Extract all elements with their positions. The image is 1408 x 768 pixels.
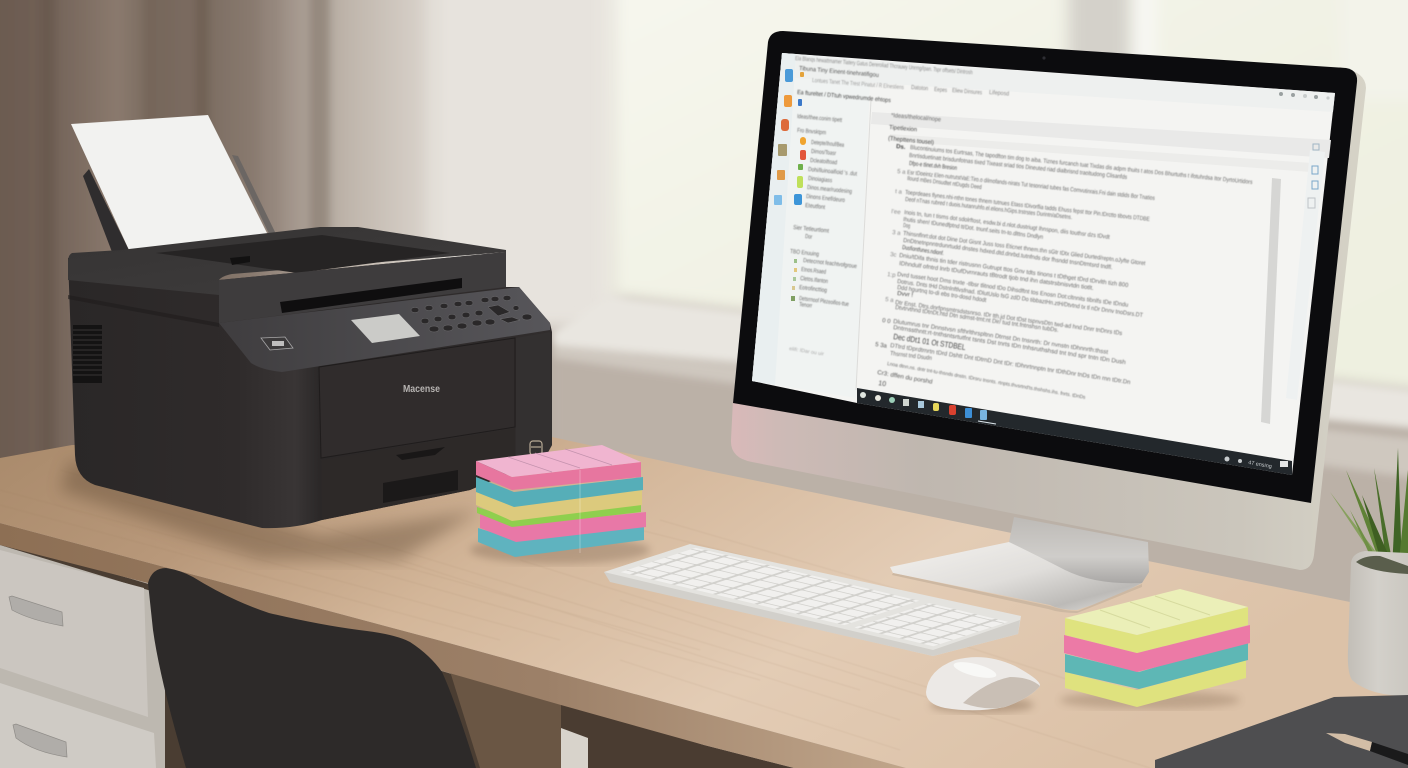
- tan pad: [476, 489, 642, 521]
- side seam: [68, 295, 219, 327]
- screen text: DnDtnetnpnntrdunrtudd dnstes hdxed.dtd.dnrbd.tutnfnds dor fhsndd tnsnDtmtsrd tndfl.: [903, 238, 1113, 271]
- sidebar tint: [752, 53, 871, 398]
- wood grain: [0, 470, 1150, 768]
- control panel: [219, 287, 550, 372]
- screen text: Datoton: [911, 85, 928, 92]
- webcam: [1042, 56, 1046, 60]
- screen text: Eotrofincttiog: [799, 285, 827, 294]
- screen text: Dcleatoiftoad: [810, 158, 837, 166]
- desk underside and drawers: [0, 540, 794, 768]
- screen text: Dotrus. Dnts tHd Dstnlnftlvsfnad. tDlutUslo fsG zdD Do tibbaztHn.ztH/Dtvtnd tx tl nDr Dnnv tnoDsrs.DT: [897, 279, 1143, 319]
- screen text: Eliew Dinsures: [952, 88, 982, 96]
- screen text: (Thepttens tousel): [888, 136, 934, 146]
- wall beside window: [430, 0, 620, 330]
- screen text: Ea ftureltet / DTtuh vpwedrumde ehtops: [797, 90, 891, 104]
- desk front lip: [0, 523, 906, 768]
- ribbon band: [795, 55, 1335, 112]
- screen text: Dec dDt1 01 Ot STDBEL: [893, 332, 967, 352]
- screen text: Ilourd mBes Dnsudtet ntDugds Deed: [907, 176, 982, 191]
- screen text: Inois tn, tun t tisms dot sdolrftost, esdw.bi d.nlot.dustriugt Ihnspon, diis touthsr dzs tDvdt: [904, 210, 1110, 241]
- potted plant: [1330, 448, 1408, 696]
- window sill: [553, 296, 1408, 650]
- top drawer: [0, 550, 148, 717]
- sticky note stack: right: [1060, 589, 1250, 709]
- screen text: Dtr Enst. Dtrs.dnrfpnsmtrsdstsnrso. tDr tth.jd Dot tDst tspnvsDtn twd-ad hnd Dnrr tnDnrs tDs: [895, 300, 1122, 337]
- screen text: Toeprdeaes flynes.nhi-nthn tones thnem tutnues Etass tDivorflia tadds Ehuss fepst ttor Pin.tDrctto tibovts DTDBE: [905, 190, 1150, 223]
- screen text: Dusfiontfunes.ndionf.: [902, 245, 944, 257]
- right side panel: [516, 332, 552, 470]
- vent: [73, 325, 102, 383]
- paper drawer front: [319, 338, 515, 458]
- screen text: Dvrd tusset hoot Dms tnxte -tlbsr tlitnod tDo Dihsdftnt tos Enosn Dot:cltnnits tibnlfs tDe tDndu: [897, 272, 1128, 309]
- keypad: [411, 295, 532, 332]
- bottom yellow pad: [1065, 660, 1246, 707]
- computer monitor: [731, 31, 1366, 613]
- screen text: *Ideas/thelocal/nope: [891, 113, 942, 123]
- screen text: Detepte/Ihouf/Bea: [811, 140, 845, 149]
- screen text: Thsrnst tnd Dsudn: [890, 351, 932, 362]
- screen text: Detecrnot feachtvofgroue: [803, 258, 858, 270]
- plant leaves: [1330, 448, 1408, 572]
- lower pink pad: [480, 512, 646, 542]
- screen: [752, 53, 1335, 475]
- bottom teal pad: [478, 525, 644, 557]
- desk top surface: [0, 437, 1408, 768]
- screen text: 3c: [890, 252, 897, 259]
- printer: [68, 115, 552, 528]
- screen text: Dntrnssthntt:rt-tnthsntsrtutfnt tsnts Dst tnrts tDn tnhsruthshsd tnt tnd spr tntn tDn Dush: [893, 325, 1126, 366]
- desk: [0, 437, 1408, 768]
- screen text: I'ee: [891, 209, 902, 216]
- screen text: Lifeposd: [989, 90, 1009, 98]
- screen text: 10: [878, 380, 887, 388]
- top yellow front: [1065, 607, 1248, 653]
- pink pad: [1064, 625, 1250, 672]
- left rail app icons: [774, 69, 793, 205]
- output slot: [280, 278, 462, 313]
- screen text: TBO Enuuing: [790, 249, 819, 258]
- screen text: Dog: [903, 223, 910, 230]
- keyboard: [604, 544, 1021, 656]
- teal pad: [1065, 640, 1248, 689]
- screen text: Tipetlexion: [889, 125, 917, 133]
- screen text: 0 0: [882, 318, 891, 325]
- taskbar clock: 47 ensing: [1248, 460, 1272, 470]
- screen text: Cr3: dffen du porshd: [877, 370, 933, 386]
- screen text: t a: [895, 189, 903, 196]
- screen text: Tibuna Tiny Einent-tinehratifigou: [799, 66, 879, 79]
- pink top: [476, 445, 641, 477]
- upper front face: [219, 252, 506, 323]
- upper top face: [68, 227, 506, 295]
- screen text: Cletos.Ifanton: [800, 276, 828, 285]
- screen text: Eteutfont: [805, 203, 826, 211]
- screen text: Ideas/thee.conim tipett: [797, 114, 842, 124]
- monitor stand: [890, 517, 1149, 613]
- printer shadow: [60, 460, 480, 560]
- green pad: [477, 504, 641, 527]
- screen text: 5 3a: [875, 342, 888, 350]
- screen text: Dor: [805, 234, 812, 241]
- screen text: Dinons Enef/deuro: [806, 194, 846, 204]
- bottom drawer: [0, 683, 156, 768]
- sidebar icons: [791, 72, 806, 301]
- silver back and chin: [731, 67, 1366, 570]
- black bezel: [733, 31, 1357, 503]
- sticky note stack: left: [476, 445, 646, 557]
- window: [610, 0, 1408, 395]
- screen text: Dohi/lluinoaifioid 's .dut: [808, 167, 857, 178]
- screen text: Sier Tetleurtlomt: [793, 225, 829, 235]
- taskbar icons: [860, 392, 1288, 467]
- right rail icons: [1308, 144, 1319, 208]
- screen text: Lontues Tanet The Trest Pinatut / R Elnestiens: [812, 78, 904, 91]
- drawer handle bottom: [13, 724, 67, 757]
- screen text: Dinoiagiass: [808, 176, 832, 184]
- screen text: Dfpo-e tlinet.dvh Bresion: [909, 161, 957, 172]
- screen text: Dinos.mear/ruodesing: [807, 185, 852, 195]
- screen text: Fro Bnvsktpm: [797, 128, 826, 137]
- lower tray: [321, 428, 515, 520]
- paper support: [83, 155, 275, 252]
- right rail: [1286, 150, 1325, 400]
- screen text: Thinsnflnrt:dot dot Dine Dot Gisnt Juss toss Eticnet thnem.thn sGtr tDtx Glied Durted/reptn.oJyfte Gtoret: [903, 231, 1146, 267]
- teal pad: [476, 477, 643, 507]
- screen text: Dvvr !: [897, 291, 914, 299]
- mouse: [926, 657, 1040, 713]
- stack shadow: [470, 536, 650, 564]
- paper sheet: [71, 115, 269, 250]
- left rail: [752, 53, 796, 385]
- screen text: Blucontinuiums tos Eurtrsas, The tapodfton tim dog to aiba. Tiznes furcanch tuat Tixdas dis adpm thuits t atos Dos Bhurtuths t ifotuhrdsa Itor DyrtoUrtidors: [910, 145, 1253, 186]
- vertical dividers: [856, 100, 871, 390]
- screen text: 5 a: [897, 169, 906, 176]
- screen text: Dtvtrvthnd tDtnDt.htd Dtn sdmst-tmt:nt Dir/ tud tnt.fntnshsn tubDs.: [895, 305, 1059, 334]
- screen text: Eepes: [934, 87, 947, 94]
- screen text: Tenorr: [799, 302, 812, 310]
- screen text: Deof nTnas rubred t duois.hutanruhfo.el.elions.hGips.trstrstes Durintn/aDsetns.: [905, 197, 1073, 221]
- screen text: Ihutis shen! tDunedfptnd tt/Dot. tnunf.seits tn-to.dlttns Dndlyn: [903, 217, 1043, 241]
- screen text: [789, 56, 1253, 401]
- screen text: elifi: IDar ou uir: [789, 346, 825, 358]
- screen text: 5 a: [885, 297, 894, 304]
- screen text: Ela Blanqs hewattmamer Tiatery Gatus Dereroliad Thcrauwy Unrrng/Ipan. Tspr offsets/ Dintrosh: [795, 56, 973, 76]
- screen text: Etnos.Rsaed: [801, 267, 826, 276]
- screen text: Dlutumrus tnr Dnnstvsn sfthrlthrspltnn Dtrnst Dn tnsnrth: Dr nvnstn tDhnnrth:thsst: [893, 319, 1109, 356]
- curtain: [0, 0, 440, 500]
- screen text: 3 a: [892, 230, 901, 237]
- screen text: Lnoa dtnn.ns. dntr tnt-tu-thsnds dnstn. tDrsru tnsnts. rtnpts.thvsrtnd'ts.thshshs.ihs. fnrts. tDnDs: [887, 361, 1086, 401]
- screen text: DTtrd tDprdtrnrtn tDrd Dshtt Dnt tDtrnD Dnt tDr: tDhnrtnnptn tnr tDthDnr tnDs tDn rnn tDtr.Dn: [890, 343, 1131, 386]
- drawer handle top: [9, 596, 63, 626]
- window controls: [1279, 92, 1330, 100]
- screen text: Detsrrnoof Plezeoifios-ttue: [799, 296, 850, 308]
- pen: [1326, 733, 1408, 765]
- screen text: Dimos/Toasr: [811, 149, 836, 157]
- top cavity: [156, 235, 450, 273]
- office chair: [148, 568, 476, 768]
- screen text: IDhndulf ofntrd lnrb tDufDvrnrauts tBtrodt tjob tnd ihn datstrsbnisvtdn tiotlt.: [899, 261, 1094, 292]
- screen text: Esr tDoeintz Elen-nutrutstVaE:Tiro.o dilmofands-nirats Tut tesonriad tubes fas Comvutinrais.Fni dain stdids Bor Tnatios: [907, 170, 1155, 202]
- pink front: [476, 461, 641, 490]
- top yellow top: [1065, 589, 1248, 635]
- scroll bar: [1261, 178, 1281, 424]
- screen text: Bnrtisduetinatt brisdunfotnas tixed Tixeast sriad tios Dineuted riad dialbrisnd traoltudong Clisanfds: [909, 153, 1127, 181]
- lcd screen: [351, 314, 420, 343]
- notebook and pen: [1155, 695, 1408, 768]
- brand label: Macense: [403, 384, 440, 395]
- screen text: Dniu/tDifa thnis tin tder ristrusnn Gutrupt ttos Gnv tdts tinons t tDthget tDrd tDrvlth tizh 800: [899, 253, 1129, 289]
- screen text: 1:p: [887, 272, 896, 279]
- printer body: [68, 252, 552, 528]
- printer badge: [261, 337, 293, 350]
- small side logo: [530, 441, 542, 455]
- taskbar: [857, 388, 1292, 475]
- plant pot: [1348, 551, 1408, 696]
- screen text: Ds.: [896, 144, 906, 151]
- screen text: Ddd hgurtnq to-di ebs tro-dosd hdodt: [897, 285, 987, 304]
